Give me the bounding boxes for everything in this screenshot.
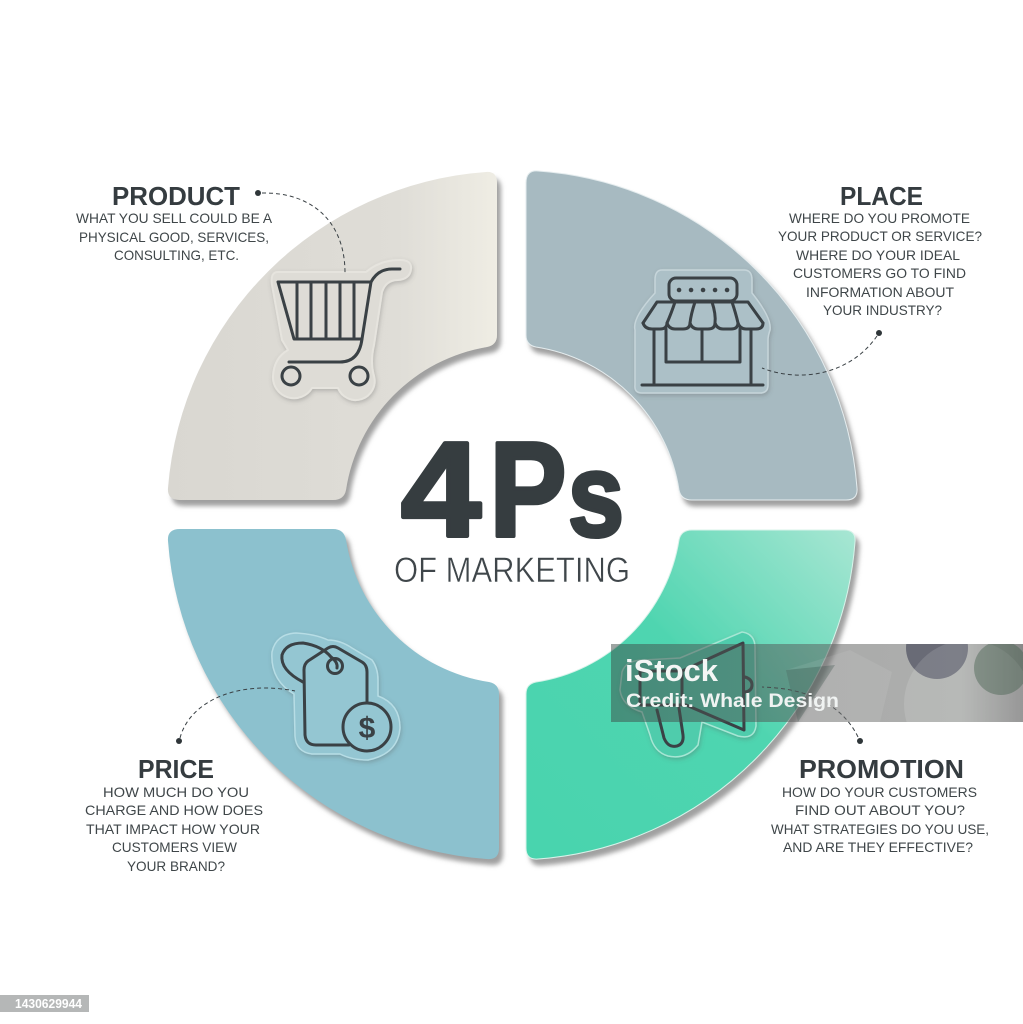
title: 4Ps: P (490, 414, 566, 565)
text block: promotion: PROMOTION (799, 754, 964, 784)
image id tag (0, 995, 89, 1012)
connector: place (762, 330, 882, 375)
text block: promotion: HOW DO YOUR CUSTOMERS (782, 784, 977, 800)
text block: promotion: WHAT STRATEGIES DO YOU USE, (771, 821, 989, 837)
text block: price (85, 754, 263, 874)
icon: shopping cart (272, 260, 411, 400)
text block: promotion (771, 754, 989, 855)
text block: place: WHERE DO YOU PROMOTE (789, 210, 970, 226)
text block: price: CHARGE AND HOW DOES (85, 802, 263, 818)
title: 4Ps: s (568, 430, 624, 562)
connector: promotion (762, 687, 863, 744)
text block: place: INFORMATION ABOUT (806, 284, 954, 300)
connector: product (255, 190, 345, 273)
text block: product: WHAT YOU SELL COULD BE A (76, 210, 273, 226)
watermark logo: iStock (625, 653, 719, 688)
text block: price: THAT IMPACT HOW YOUR (86, 821, 260, 837)
title: 4Ps: 4 (401, 414, 481, 565)
text block: place (778, 181, 982, 318)
text block: place: YOUR INDUSTRY? (823, 302, 942, 318)
panel: promotion quadrant (526, 530, 855, 859)
text block: product: CONSULTING, ETC. (114, 247, 239, 263)
panel: place quadrant (526, 171, 857, 500)
text block: promotion: AND ARE THEY EFFECTIVE? (783, 839, 973, 855)
watermark credit: Credit: Whale Design (626, 691, 839, 712)
text block: place: YOUR PRODUCT OR SERVICE? (778, 228, 982, 244)
text block: place: PLACE (840, 181, 923, 211)
text block: place: WHERE DO YOUR IDEAL (796, 247, 960, 263)
dollar sign: $ (359, 712, 376, 745)
icon: megaphone (620, 632, 756, 757)
icon: price tag (272, 633, 400, 760)
image id tag: 1430629944 (15, 997, 82, 1011)
text block: price: HOW MUCH DO YOU (103, 784, 249, 800)
watermark: stock photo band (611, 644, 1023, 722)
text block: price: PRICE (138, 754, 214, 784)
text block: product: PHYSICAL GOOD, SERVICES, (79, 229, 269, 245)
panel: product quadrant (168, 172, 497, 500)
connector: price (176, 688, 295, 744)
text block: product: PRODUCT (112, 181, 240, 211)
subtitle: of marketing: OF MARKETING (394, 551, 630, 590)
text block: price: YOUR BRAND? (127, 858, 225, 874)
text block: price: CUSTOMERS VIEW (112, 839, 238, 855)
icon: storefront (635, 270, 770, 393)
text block: promotion: FIND OUT ABOUT YOU? (795, 802, 965, 818)
text block: product (76, 181, 273, 263)
panel: price quadrant (168, 529, 499, 859)
text block: place: CUSTOMERS GO TO FIND (793, 265, 966, 281)
